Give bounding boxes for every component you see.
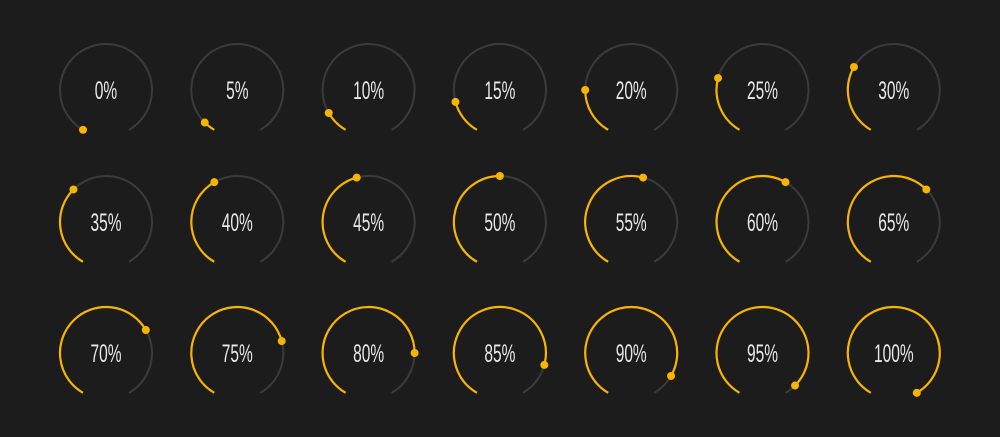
gauge 30% [848,44,940,130]
gauge 95%: 95% [747,340,778,368]
gauge 35% [60,176,152,262]
gauge 25%: 25% [747,77,778,105]
gauge 55% [585,174,677,262]
gauge 60%: 60% [747,209,778,237]
gauge 90% [585,307,677,393]
gauge 30%: 30% [878,77,909,105]
gauge 50%: 50% [484,209,515,237]
gauge 40% [191,176,283,262]
gauge 20%: 20% [616,77,647,105]
gauge 90%: 90% [616,340,647,368]
gauge 5% [191,44,283,130]
gauge 0% [60,44,152,134]
gauge 45% [323,174,415,262]
gauge 65%: 65% [878,209,909,237]
gauge 85% [454,307,548,393]
gauge 15% [451,44,546,130]
gauge 75%: 75% [222,340,253,368]
gauge 50% [454,172,546,262]
gauge 80% [323,307,419,393]
gauge 70% [60,307,152,393]
gauge 95% [717,307,809,393]
gauge 40%: 40% [222,209,253,237]
gauge 10% [323,44,415,130]
gauge 25% [714,44,809,130]
gauge 60% [717,176,809,262]
gauge 0%: 0% [95,77,117,105]
gauge 80%: 80% [353,340,384,368]
gauge 65% [848,176,940,262]
gauge 20% [581,44,677,130]
gauge 10%: 10% [353,77,384,105]
gauge 85%: 85% [484,340,515,368]
gauge 5%: 5% [226,77,248,105]
gauge 75% [191,307,286,393]
gauge 100%: 100% [874,340,914,368]
gauge 15%: 15% [484,77,515,105]
gauge 55%: 55% [616,209,647,237]
gauge 70%: 70% [91,340,121,368]
gauge 45%: 45% [353,209,384,237]
gauge 35%: 35% [91,209,121,237]
gauge 100% [848,307,940,397]
